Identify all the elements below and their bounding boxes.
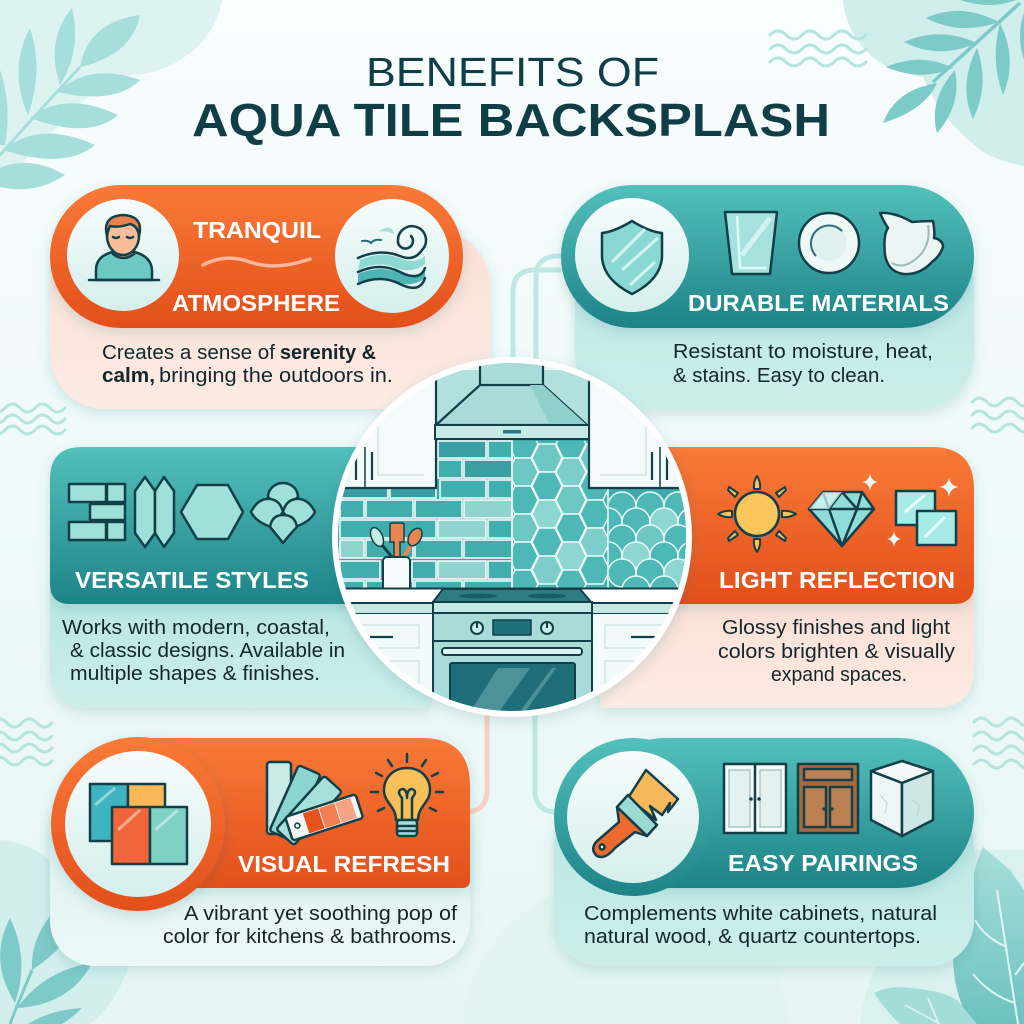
icon: diamond xyxy=(809,492,874,546)
panel body xyxy=(50,790,470,966)
description xyxy=(62,617,345,685)
header pill xyxy=(561,185,974,328)
description: calm, xyxy=(102,365,155,387)
heading: tranquil: TRANQUIL xyxy=(193,217,321,243)
connector lines xyxy=(463,256,561,812)
panel: light reflection xyxy=(600,447,974,708)
description: Glossy finishes and light xyxy=(722,617,950,639)
panel body xyxy=(50,230,490,409)
title line 2: AQUA TILE BACKSPLASH xyxy=(192,94,830,146)
header band xyxy=(50,447,400,604)
description xyxy=(163,903,457,948)
stove xyxy=(432,590,593,711)
panel body xyxy=(50,590,430,708)
icon: plate xyxy=(799,213,859,273)
leaves: top right xyxy=(883,0,1024,133)
icon: swatch fan xyxy=(267,762,363,845)
icon: paint brush xyxy=(567,751,699,883)
panel body xyxy=(600,590,974,708)
panel: tranquil atmosphere xyxy=(50,185,490,409)
description: & classic designs. Available in xyxy=(70,640,345,662)
leaves: bottom left xyxy=(0,905,92,1024)
description: serenity & xyxy=(280,342,376,364)
description xyxy=(102,342,393,387)
icon: shield xyxy=(575,198,689,312)
description: & stains. Easy to clean. xyxy=(673,365,885,387)
tile backsplash: fish scales xyxy=(609,488,686,588)
description: A vibrant yet soothing pop of xyxy=(184,903,457,925)
decorative waves: mid right xyxy=(972,398,1024,432)
utensils and cup xyxy=(370,522,423,588)
heading: LIGHT REFLECTION xyxy=(719,567,955,593)
wall behind hood xyxy=(436,370,589,424)
decorative waves: lower right xyxy=(974,718,1024,768)
description: Creates a sense of xyxy=(102,342,275,364)
tile backsplash: hexagons xyxy=(513,441,608,588)
leaves: top left xyxy=(0,8,140,189)
heading: EASY PAIRINGS xyxy=(728,850,918,876)
header pill xyxy=(50,185,463,328)
header band xyxy=(138,738,470,888)
icon: colored tiles xyxy=(65,751,211,897)
squiggle divider xyxy=(203,258,310,266)
decorative waves: top right xyxy=(770,31,866,66)
panel: visual refresh xyxy=(50,737,470,966)
icon: light bulb xyxy=(371,754,443,836)
heading: VISUAL REFRESH xyxy=(238,851,450,877)
header band xyxy=(640,447,974,604)
description: Complements white cabinets, natural xyxy=(584,903,937,925)
icon: scale tiles xyxy=(251,483,315,543)
icon: picket tiles xyxy=(135,477,174,547)
panel body xyxy=(554,800,974,966)
description: color for kitchens & bathrooms. xyxy=(163,926,457,948)
description: expand spaces. xyxy=(771,664,907,686)
panel: easy pairings xyxy=(554,738,974,966)
upper cabinets xyxy=(344,380,680,490)
description xyxy=(718,617,955,686)
icon: hexagon tile xyxy=(181,485,243,539)
icon: ceramic jug xyxy=(880,213,943,274)
counter and lower cabinets xyxy=(346,588,678,691)
circle badge xyxy=(51,737,225,911)
decorative waves: mid left xyxy=(0,404,65,434)
tile backsplash: subway xyxy=(330,439,690,589)
heading: atmosphere: ATMOSPHERE xyxy=(172,290,340,316)
icon: sea breeze xyxy=(335,199,449,313)
description xyxy=(584,903,937,948)
icon: glossy tiles with sparkles xyxy=(862,473,959,547)
center kitchen illustration xyxy=(330,350,706,729)
leaves: bottom right xyxy=(874,847,1024,1024)
circle badge xyxy=(554,738,712,896)
header pill xyxy=(590,738,974,888)
panel: versatile styles xyxy=(50,447,430,708)
panel body xyxy=(575,230,974,410)
icon: calm person xyxy=(67,199,179,311)
icon: sun xyxy=(718,476,796,552)
decorative waves: lower left xyxy=(0,719,52,765)
heading: VERSATILE STYLES xyxy=(75,567,309,593)
range hood xyxy=(434,363,588,440)
description xyxy=(673,341,933,387)
description: Works with modern, coastal, xyxy=(62,617,330,639)
icon: wood cabinet xyxy=(798,764,858,833)
description: natural wood, & quartz countertops. xyxy=(584,926,921,948)
panel: durable materials xyxy=(561,185,974,410)
icon: subway tiles xyxy=(69,484,125,540)
description: colors brighten & visually xyxy=(718,641,955,663)
heading: DURABLE MATERIALS xyxy=(688,290,949,316)
description: Resistant to moisture, heat, xyxy=(673,341,933,363)
description: multiple shapes & finishes. xyxy=(70,663,320,685)
icon: white cabinet xyxy=(724,764,786,833)
title xyxy=(192,49,830,146)
description: bringing the outdoors in. xyxy=(159,365,393,387)
icon: quartz block xyxy=(871,761,933,836)
title line 1: BENEFITS OF xyxy=(366,49,659,95)
icon: glass xyxy=(725,212,777,274)
